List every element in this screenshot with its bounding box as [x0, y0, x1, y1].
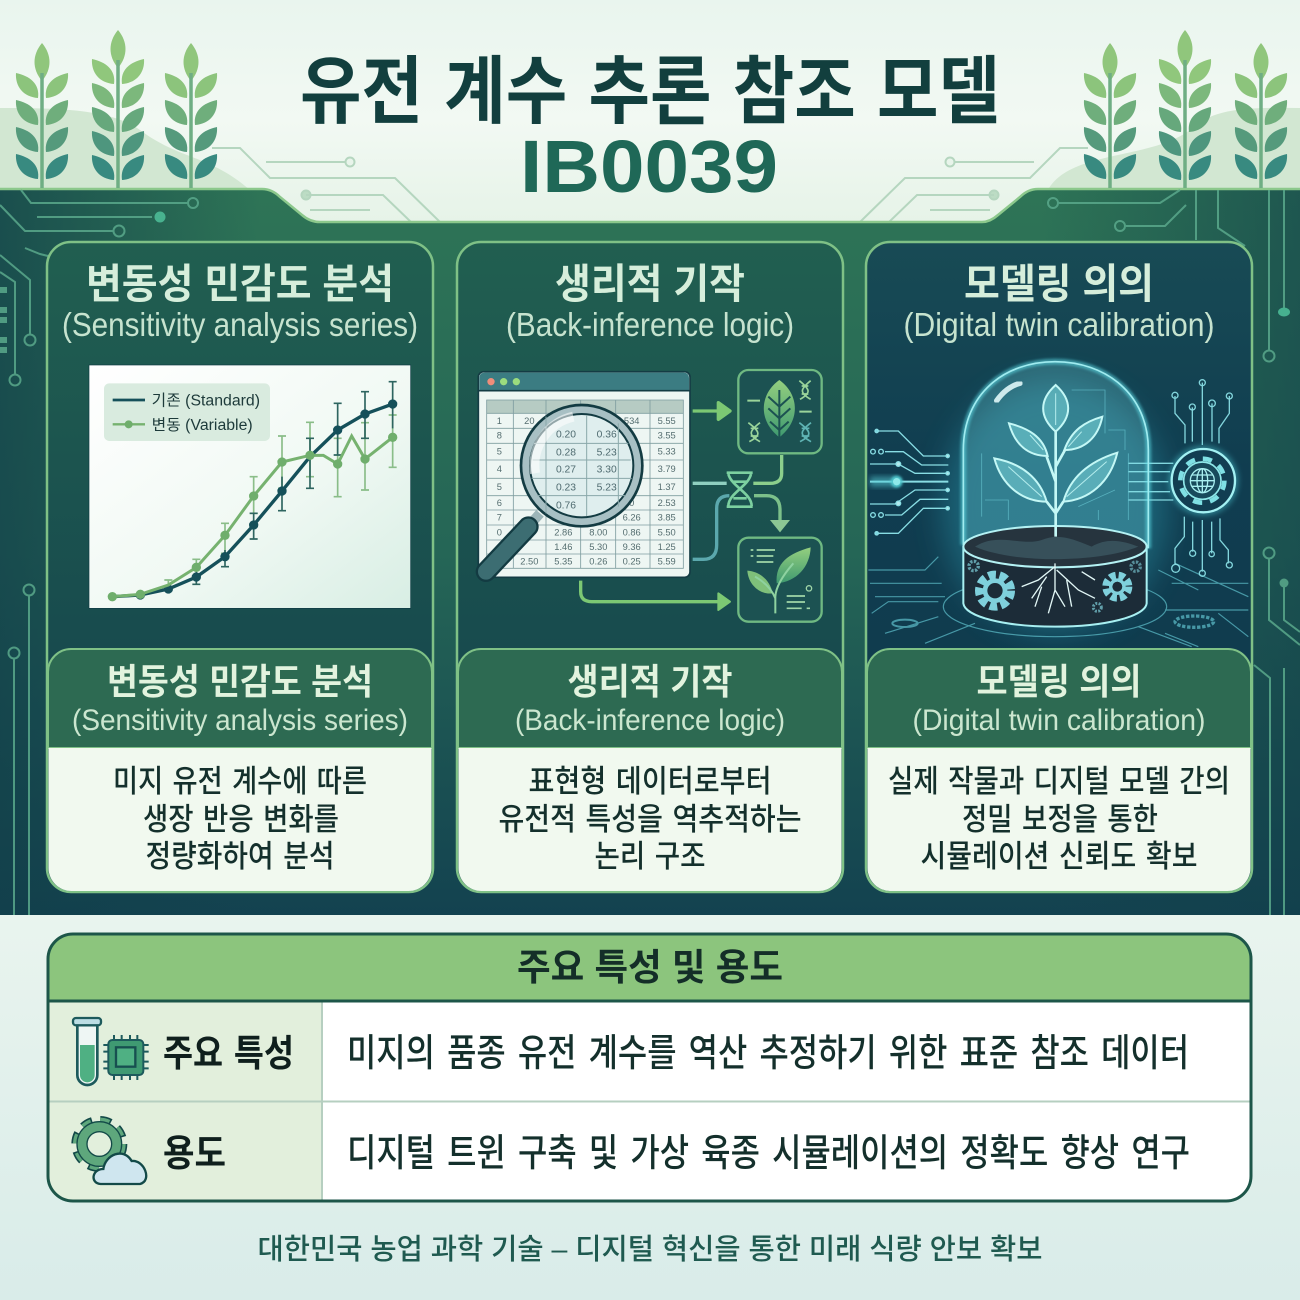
series: variable: [108, 433, 397, 601]
card lower header: [458, 649, 842, 748]
dark circuit panel: [0, 189, 1300, 915]
background: sky header: [0, 0, 1300, 240]
card lower header: [867, 649, 1251, 748]
chart legend: 변동 (Variable): [152, 417, 253, 434]
data window: 6: [497, 498, 502, 508]
card lower header: [48, 649, 432, 748]
digital twin illustration: [868, 362, 1248, 647]
data window: 5: [497, 482, 502, 492]
series: standard: [112, 399, 397, 600]
glowing plant: [994, 385, 1117, 537]
soil cylinder: [963, 526, 1147, 627]
lower subheading: (Sensitivity analysis series): [72, 704, 408, 737]
card body text: 유전적 특성을 역추적하는: [498, 802, 802, 837]
circuit floor: [868, 557, 1248, 647]
error bars: variable: [164, 415, 397, 590]
icon: gear globe: [1168, 446, 1238, 516]
card frame: [47, 242, 433, 892]
card body text: 정량화하여 분석: [146, 839, 334, 874]
card heading: 모델링 의의: [964, 261, 1154, 307]
roots: [1022, 563, 1095, 613]
lower subheading: (Digital twin calibration): [912, 704, 1206, 737]
data window: 0.25: [623, 557, 641, 567]
icon: magnifier: 0.23: [556, 483, 576, 494]
circuit right: [1128, 380, 1232, 576]
row label: use: 용도: [163, 1133, 226, 1174]
background: right hill: [1048, 108, 1300, 240]
lower subheading: (Back-inference logic): [515, 704, 785, 737]
gears: [969, 561, 1140, 611]
glass dome: [963, 362, 1148, 548]
icon: test tube and chip: [73, 1018, 149, 1085]
card body: [458, 748, 842, 891]
icon: magnifier: 5.23: [597, 483, 617, 494]
icon: gear and cloud: [79, 1123, 146, 1184]
data window: 534: [624, 416, 639, 426]
data window: 7: [497, 513, 502, 523]
data window: 8: [497, 431, 502, 441]
card frame: [457, 242, 843, 892]
data window: 6.26: [623, 513, 641, 523]
data window: 5.33: [658, 447, 676, 457]
glowing node: [870, 476, 903, 488]
panel: digital twin calibration: [866, 242, 1252, 892]
background: lower section: [0, 912, 1300, 1300]
data window: 5.55: [658, 416, 676, 426]
chart legend: [104, 383, 270, 441]
lower heading: 모델링 의의: [976, 661, 1142, 702]
data window: 0.26: [589, 557, 607, 567]
data window: 1.37: [658, 482, 676, 492]
card body text: 생장 반응 변화를: [143, 802, 339, 837]
icon: magnifier: 0.20: [556, 429, 576, 440]
title: [300, 50, 1000, 208]
error bars: standard: [192, 382, 397, 584]
circuit left: [870, 429, 949, 535]
background glow: [942, 380, 1168, 633]
card body: [868, 748, 1250, 891]
data flow illustration: [478, 370, 822, 622]
icon: magnifier: 0.36: [597, 429, 617, 440]
card body text: 정밀 보정을 통한: [962, 802, 1158, 837]
data window: 1: [497, 416, 502, 426]
chart legend: 기존 (Standard): [152, 393, 260, 410]
table header text: 주요 특성 및 용도: [517, 947, 783, 988]
line chart: [89, 365, 411, 608]
panel: sensitivity analysis: [47, 242, 433, 892]
card body text: 실제 작물과 디지털 모델 간의: [888, 764, 1230, 799]
data window: 2.50: [520, 557, 538, 567]
card frame: [866, 242, 1252, 892]
data window: 1.25: [658, 542, 676, 552]
background: left hill: [0, 108, 250, 240]
data window: 5.59: [658, 557, 676, 567]
card body text: [888, 764, 1230, 874]
icon: magnifier: 0.27: [556, 465, 576, 476]
data window: 5: [497, 447, 502, 457]
table left column: [49, 1000, 322, 1201]
card body text: 표현형 데이터로부터: [528, 764, 772, 799]
arrow: to leaf box: [693, 403, 730, 419]
card body text: 논리 구조: [594, 839, 706, 874]
panel: back-inference logic: [457, 242, 843, 892]
icon: magnifier: 0.28: [556, 447, 576, 458]
lower heading: 변동성 민감도 분석: [107, 661, 373, 702]
card body: [48, 748, 432, 891]
icon: plant data box: [738, 538, 822, 622]
card subheading: (Sensitivity analysis series): [62, 306, 418, 343]
data window: 0: [497, 527, 502, 537]
icon: magnifier: 5.23: [597, 447, 617, 458]
data window: 2.86: [554, 527, 572, 537]
data window: 1.46: [554, 542, 572, 552]
row label: key feature: 주요 특성: [163, 1033, 294, 1074]
icon: wheat plants right: [1084, 30, 1287, 188]
data window: [478, 372, 690, 577]
connector lines: [693, 455, 782, 559]
data window: 5.30: [589, 542, 607, 552]
icon: leaf and DNA box: [738, 370, 822, 453]
table frame: [48, 934, 1251, 1201]
data window: 4: [497, 464, 502, 474]
panel: key features table: [48, 934, 1251, 1201]
data window: 0.86: [623, 527, 641, 537]
icon: magnifier: 0.76: [556, 501, 576, 512]
data window: 0: [629, 498, 634, 508]
arrow: to plant box: [581, 581, 730, 610]
data window: 5.35: [554, 557, 572, 567]
card body text: 시뮬레이션 신뢰도 확보: [920, 839, 1198, 874]
lower heading: 생리적 기작: [568, 661, 732, 702]
table rules: [48, 1001, 1251, 1200]
data window: 3.55: [658, 431, 676, 441]
card subheading: (Back-inference logic): [506, 306, 794, 343]
icon: magnifier: 3.30: [597, 465, 617, 476]
footer text: 대한민국 농업 과학 기술 – 디지털 혁신을 통한 미래 식량 안보 확보: [258, 1233, 1042, 1266]
data window: 3.85: [658, 513, 676, 523]
data window: 2.53: [658, 498, 676, 508]
title line 1: 유전 계수 추론 참조 모델: [300, 50, 1000, 133]
icon: wheat plants left: [16, 30, 217, 188]
chart background: [89, 365, 411, 608]
card body text: 미지 유전 계수에 따른: [113, 764, 367, 799]
title line 2: IB0039: [520, 125, 778, 208]
table body: [49, 1000, 1250, 1201]
card heading: 생리적 기작: [555, 261, 745, 307]
icon: DNA helix: [727, 473, 753, 507]
card body text: [498, 764, 802, 874]
data window: 9.36: [623, 542, 641, 552]
data window: 8.00: [589, 527, 607, 537]
card body text: [113, 764, 367, 874]
card subheading: (Digital twin calibration): [904, 306, 1214, 343]
panel circuit traces: [0, 190, 1300, 915]
card heading: 변동성 민감도 분석: [86, 261, 394, 307]
data window: 3.79: [658, 464, 676, 474]
header circuit lines: [212, 148, 1088, 222]
arrow: down to plant box: [770, 520, 790, 532]
table header band: [48, 934, 1251, 1000]
data window: 5.50: [658, 527, 676, 537]
data window: 20: [524, 416, 535, 426]
icon: magnifier: [486, 404, 644, 572]
